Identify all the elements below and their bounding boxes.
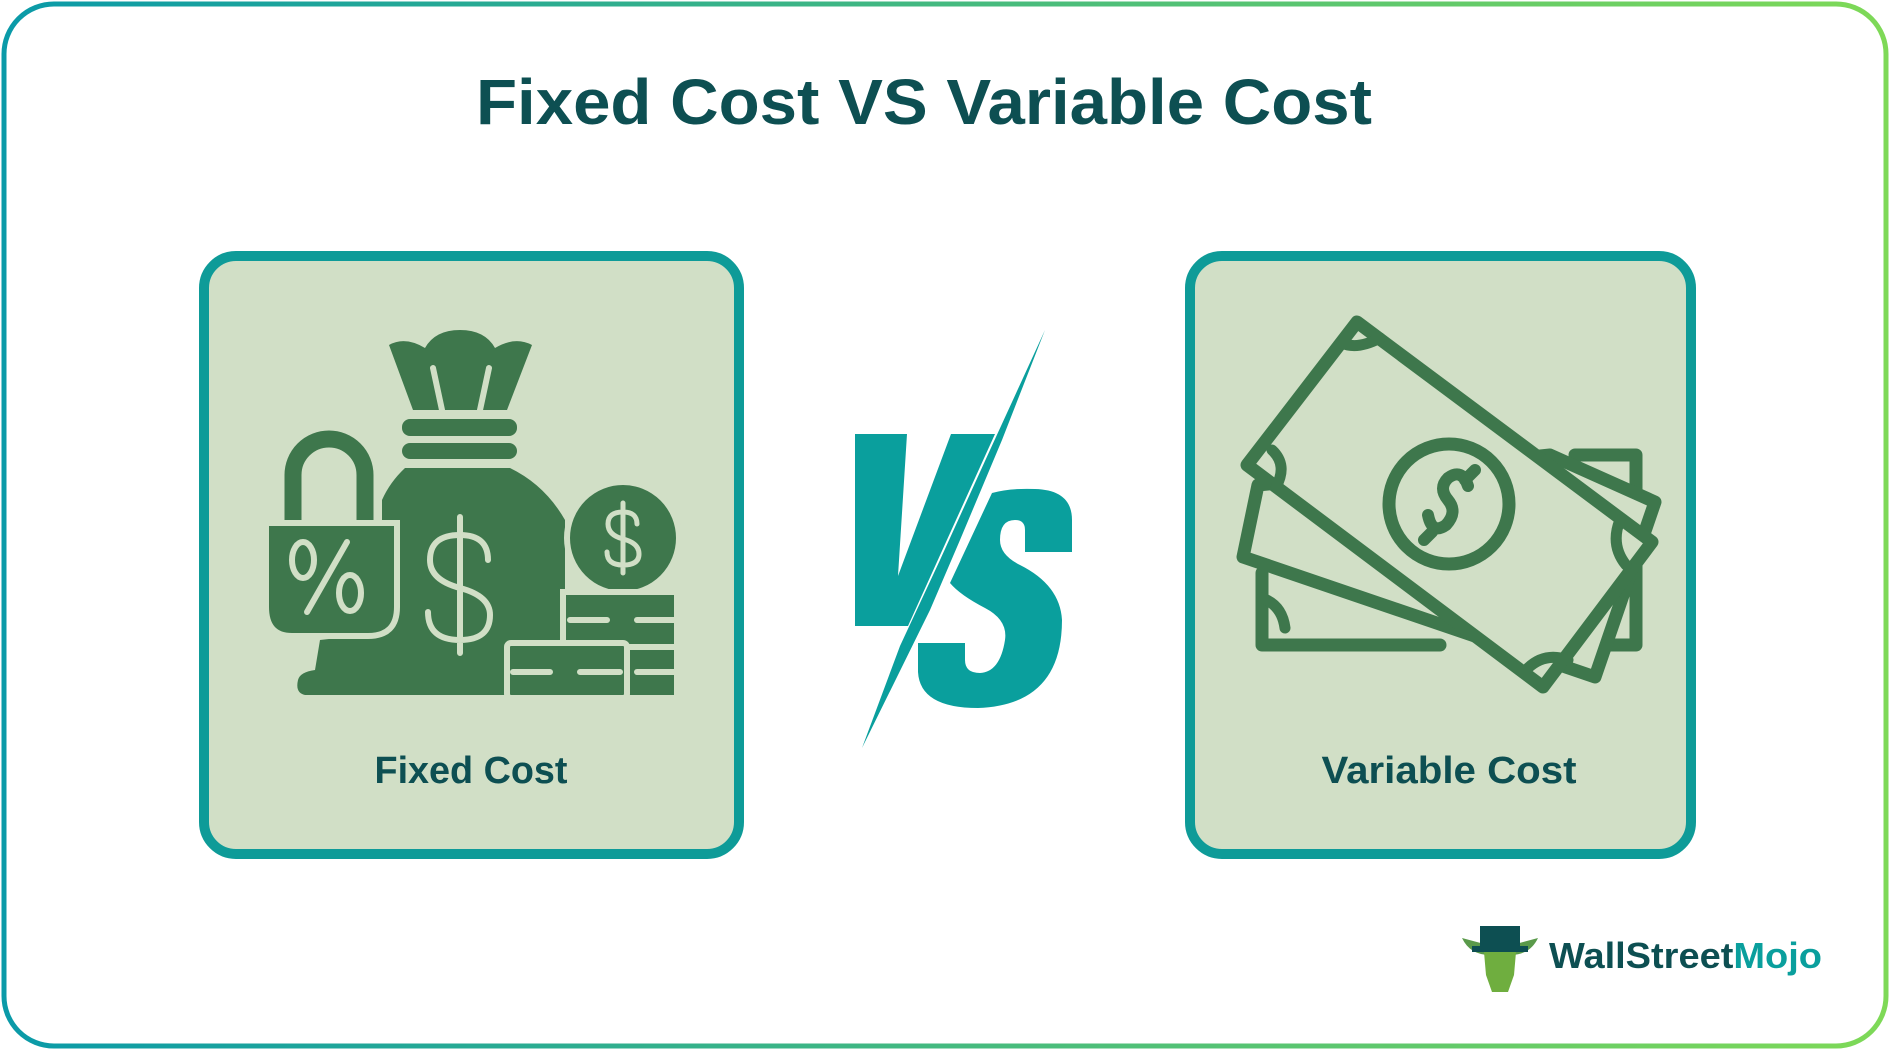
icon: bull: [1462, 926, 1538, 992]
panel: variable cost: [1190, 256, 1691, 854]
logo: wallstreetmojo: WallStreet Mojo: [1549, 935, 1822, 976]
vs graphic: [855, 330, 1072, 748]
icon: banknotes: [1243, 322, 1655, 687]
label: fixed cost: Fixed Cost: [374, 750, 568, 792]
title: Fixed Cost VS Variable Cost: [476, 66, 1372, 138]
logo: wallstreetmojo: [1462, 926, 1822, 992]
panel: fixed cost: [204, 256, 739, 854]
icon: money bag with lock and coins: [266, 330, 679, 698]
label: variable cost: Variable Cost: [1322, 750, 1577, 792]
